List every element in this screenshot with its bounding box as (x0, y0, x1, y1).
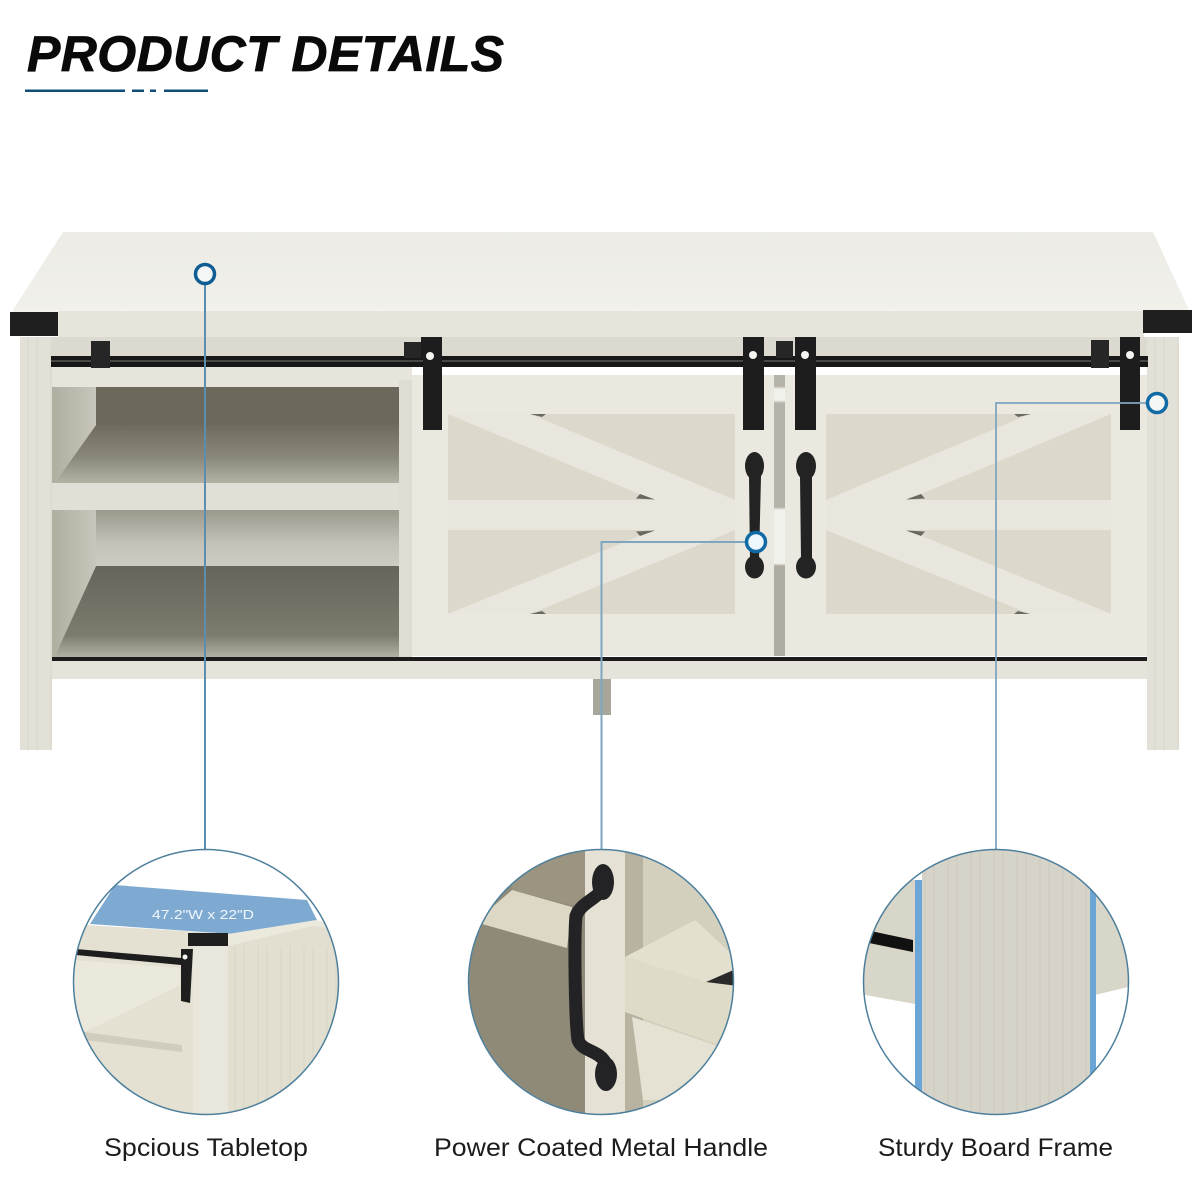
corner bracket (188, 933, 228, 946)
right door bar notches (906, 414, 1031, 614)
sliding rail (51, 356, 1148, 367)
right leg (1147, 337, 1179, 750)
door front (70, 924, 232, 1120)
blue tabletop highlight (90, 885, 317, 934)
title: PRODUCT DETAILS (27, 26, 504, 82)
corner brackets (10, 310, 1192, 336)
left door handle (745, 452, 764, 578)
lower floor (54, 566, 399, 658)
cross bars (625, 920, 738, 982)
dimension text: 47.2"W x 22"D (152, 907, 254, 922)
callout: handle pointer (602, 532, 766, 850)
tabletop front edge (13, 309, 1189, 337)
bottom rail (52, 657, 1148, 679)
callout: frame pointer (996, 394, 1166, 850)
upper side wall (52, 387, 96, 484)
right door (785, 375, 1148, 656)
left door cross bars (448, 414, 735, 614)
upper shelf surface (54, 425, 399, 484)
lower side wall (52, 510, 96, 658)
label: handle: Power Coated Metal Handle (434, 1134, 768, 1162)
back leg (593, 678, 611, 715)
sliding rail end (869, 931, 913, 952)
left rail section (860, 880, 915, 1004)
left leg (20, 337, 52, 750)
tabletop surface (13, 232, 1189, 310)
door stile (585, 845, 625, 1119)
detail circle: board frame (860, 845, 1132, 1119)
callout: tabletop pointer (196, 264, 214, 850)
metal handle (575, 884, 606, 1064)
left door panel (448, 414, 735, 614)
upper back board (52, 337, 1148, 357)
rail (76, 949, 181, 965)
partition (399, 380, 412, 658)
lower back wall (96, 510, 399, 566)
right rail section (1096, 896, 1128, 995)
rail mount blocks (91, 340, 1109, 368)
shelf (475, 890, 572, 948)
upper back wall (96, 387, 399, 425)
centre board (922, 845, 1090, 1119)
hanger bolts (426, 351, 1134, 360)
label: tabletop: Spcious Tabletop (104, 1134, 308, 1162)
door panel (643, 857, 730, 1107)
door hangers (421, 337, 1140, 430)
furniture: sliding barn door cabinet (10, 232, 1192, 750)
shelf front (52, 483, 399, 510)
right door cross bars (826, 414, 1111, 614)
label: frame: Sturdy Board Frame (878, 1134, 1113, 1162)
title underline (25, 90, 208, 92)
corner post (193, 946, 228, 1120)
blue frame highlights (915, 880, 922, 1105)
detail circle: handle (465, 845, 738, 1119)
left door (412, 375, 774, 656)
open shelves compartment (52, 367, 412, 659)
detail circle: tabletop (70, 845, 345, 1120)
centre gap between doors (774, 375, 785, 656)
top edge of side (228, 920, 326, 946)
side panel (228, 926, 338, 1111)
right door panel (826, 414, 1111, 614)
left door bar notches (530, 414, 655, 614)
right door handle (796, 452, 816, 578)
hanger (181, 949, 193, 1003)
